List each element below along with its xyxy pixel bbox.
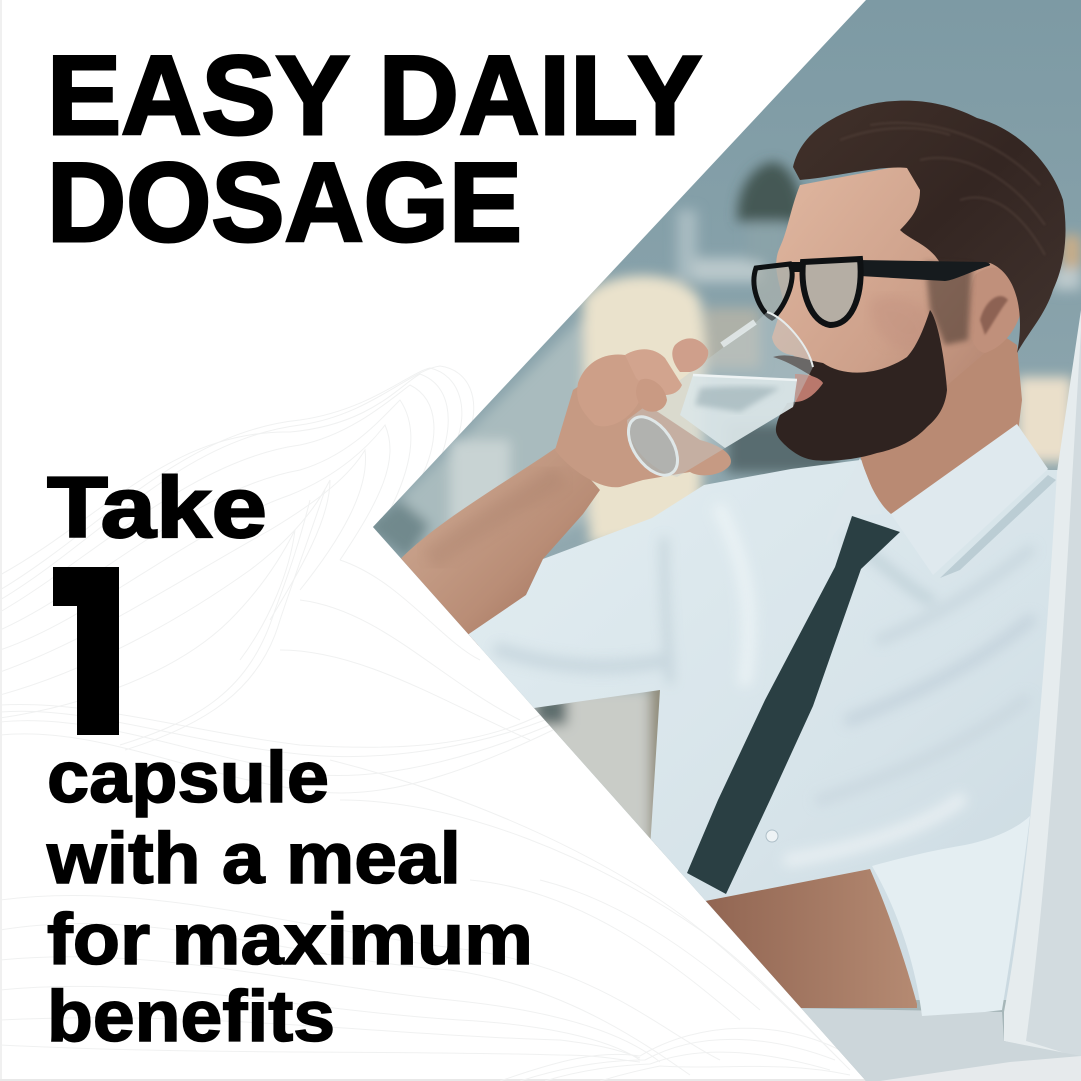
glass of water [619, 312, 813, 484]
shirt folds [500, 510, 1030, 860]
shirt collar [859, 424, 1056, 578]
glasses [754, 259, 990, 325]
title [47, 33, 702, 265]
face [772, 168, 998, 385]
beard [773, 310, 947, 461]
desk [790, 1008, 1081, 1081]
instruction text [46, 738, 533, 1057]
title: DOSAGE [47, 140, 522, 265]
photo background wall [360, 0, 1081, 1081]
word: take: Take [47, 460, 267, 556]
instruction text: with a meal [46, 819, 461, 899]
fingers [578, 338, 708, 412]
lower forearm [690, 869, 917, 1008]
numeral: 1 [53, 567, 119, 735]
dosage instructions [30, 460, 533, 1057]
keyboard [880, 1056, 1081, 1081]
sideburn fade [925, 262, 972, 345]
wave line pattern [0, 366, 850, 1081]
numeral: 1: 1 [30, 521, 162, 786]
lips [795, 374, 823, 402]
neck [860, 338, 1022, 514]
instruction text: benefits [47, 977, 335, 1057]
shirt torso and sleeve [460, 460, 1081, 1000]
instruction text: for maximum [47, 900, 533, 980]
monitor [1004, 310, 1081, 1060]
palm behind glass [556, 387, 731, 488]
blurred office objects [365, 162, 1081, 860]
arm hair shading [434, 480, 552, 558]
hair [793, 101, 1066, 353]
ear [974, 269, 1020, 338]
cheek shading [880, 306, 895, 322]
hair highlights [840, 123, 1045, 255]
raised forearm [395, 445, 600, 650]
shirt button [766, 830, 778, 842]
photo: man drinking water at desk [360, 0, 1081, 1081]
instruction text: capsule [47, 738, 329, 818]
rolled shirt cuff [872, 816, 1030, 1016]
necktie [687, 516, 900, 894]
title: EASY DAILY [47, 33, 702, 158]
